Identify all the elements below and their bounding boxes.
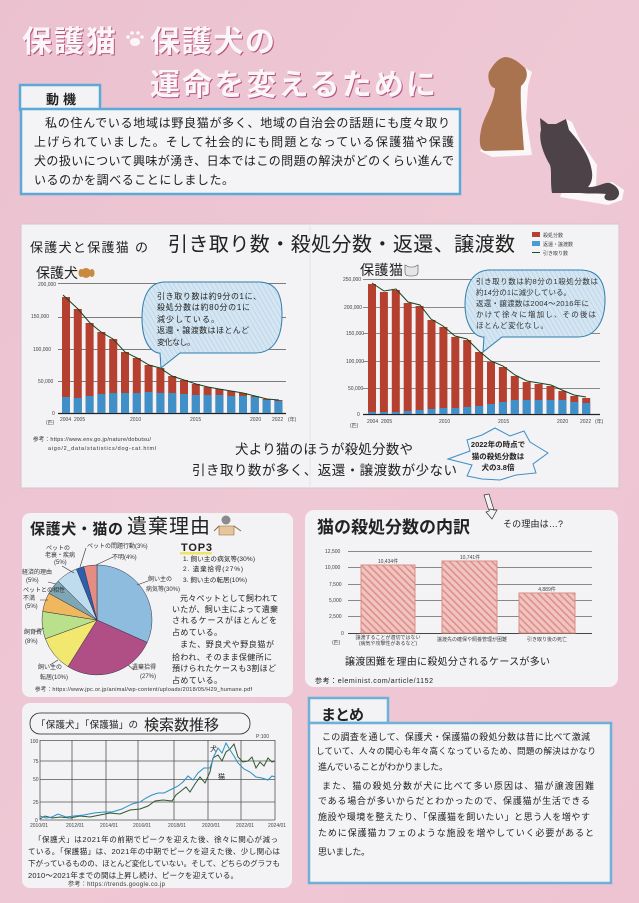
- pie leader lines: [35, 548, 148, 670]
- bar chart: 10,741件: [460, 554, 480, 561]
- conclusion tab: [309, 698, 388, 723]
- dog gridlines and axis labels: 0: [52, 411, 55, 417]
- conclusion text: また、猫の殺処分数が犬に比べて多い原因は、猫が譲渡困難: [322, 780, 594, 791]
- dog callout: 殺処分数は約80分の1に: [157, 302, 250, 312]
- pie labels: 老衰・疾病: [45, 551, 75, 559]
- motivation text: いるのかを調べることにしました。: [34, 173, 234, 187]
- bar chart: 0: [341, 631, 344, 637]
- summary text: [192, 442, 457, 478]
- cat gridlines and axis labels: 150,000: [346, 331, 364, 337]
- bar chart: [325, 549, 592, 647]
- pie labels: (5%): [26, 578, 39, 584]
- top 3: 3. 飼い主の転居(10%): [183, 575, 247, 584]
- bar chart: 2,500: [329, 614, 342, 620]
- cat chart label: 保護猫: [360, 262, 403, 278]
- search trends text: 下がっているものの、ほとんど変化していない。そして、どちらのグラフも: [28, 858, 280, 868]
- cat gridlines and axis labels: 250,000: [343, 277, 361, 283]
- icon: dog head: [78, 268, 94, 278]
- title: 保護猫: [23, 27, 117, 60]
- search trends text: 「保護犬」は2021年の前期でピークを迎えた後、徐々に関心が減っ: [34, 834, 278, 844]
- callout: 3.8 times burst: [448, 428, 548, 480]
- panel heading: 引き取り数・殺処分数・返還、譲渡数: [168, 233, 515, 256]
- dog gridlines and axis labels: 50,000: [38, 379, 54, 385]
- pie labels: 飼い主の: [38, 663, 62, 671]
- redraw arrow tip over panel: [486, 509, 497, 519]
- heading: 保護犬・猫の: [30, 520, 123, 538]
- legend: 返還・譲渡数: [543, 241, 573, 248]
- cat callout: 引き取り数は約8分の1殺処分数は: [476, 276, 598, 286]
- conclusion box: [309, 723, 611, 883]
- cat gridlines and axis labels: 2005: [381, 419, 392, 425]
- title: 運命を変えるために: [151, 70, 437, 103]
- cat gridlines and axis labels: 2020: [557, 419, 568, 425]
- search trends text: [28, 834, 280, 880]
- title: 保護猫: [22, 26, 116, 59]
- dog gridlines and axis labels: 2022: [272, 417, 283, 423]
- cat callout: 約14分の1に減少している。: [476, 287, 571, 297]
- dog gridlines and axis labels: 2010: [130, 417, 141, 423]
- pie labels: 飼い主の: [148, 575, 172, 583]
- cat callout: [465, 270, 605, 352]
- reasons text: [172, 594, 278, 685]
- dog callout: 引き取り数は約9分の1に、: [157, 291, 261, 301]
- motivation text: [34, 115, 454, 187]
- pie labels: 不満: [23, 594, 35, 602]
- pie labels: 転居(10%): [40, 673, 68, 681]
- reference: breakdown: 参考：eleminist.com/article/1152: [315, 676, 433, 685]
- callout: 3.8 times burst: 2022年の時点で: [471, 439, 526, 449]
- conclusion text: 思いました。: [318, 847, 370, 857]
- heading: [30, 515, 210, 538]
- dog gridlines and axis labels: 2004: [60, 417, 71, 423]
- reasons text: 占めている。: [172, 675, 222, 685]
- title: 保護犬の: [151, 27, 276, 60]
- line chart: 50: [33, 777, 39, 783]
- callout: 3.8 times burst: 猫の殺処分数は: [472, 451, 525, 461]
- panel heading: 保護犬と保護猫 の: [30, 240, 148, 255]
- motivation heading: 動機: [46, 92, 76, 107]
- line chart: 2014/01: [100, 823, 118, 829]
- panel: motivation: [20, 85, 460, 194]
- icon: dog in box: [214, 516, 241, 535]
- motivation text: 私の住んでいる地域は野良猫が多く、地域の自治会の話題にも度々取り: [45, 115, 450, 130]
- line chart: 25: [33, 800, 39, 806]
- line chart: 猫: [218, 772, 225, 781]
- cat gridlines and axis labels: [343, 277, 604, 429]
- bar chart: (病気や攻撃性があるなど): [359, 640, 417, 647]
- line chart: 0: [35, 818, 38, 824]
- dog callout: 変化なし。: [157, 337, 195, 347]
- motivation text: 上げられていました。そして社会的にも問題となっている保護猫や保護: [34, 134, 454, 149]
- title: 運命を変えるために: [150, 69, 436, 102]
- cat bars: euthanised: [368, 284, 590, 414]
- motivation text: 犬の扱いについて興味が湧き、日本ではこの問題の解決がどのくらい進んで: [34, 153, 454, 168]
- panel background: [21, 224, 619, 488]
- pie labels: 飼育費: [24, 628, 42, 636]
- reference: trends: 参考：https://trends.google.co.jp: [68, 880, 166, 888]
- search trends text: 2010〜2021年までの間は上昇し続け、ピークを迎えている。: [28, 870, 238, 880]
- pie labels: 不明(4%): [112, 554, 137, 561]
- pie labels: 遺棄拾得: [132, 663, 156, 671]
- cat callout: ほとんど変化なし。: [476, 320, 548, 330]
- reasons text: 預けられたケースも3割ほど: [172, 663, 276, 673]
- reasons text: 元々ペットとして飼われて: [180, 594, 278, 603]
- heading pill: 検索数推移: [144, 717, 219, 734]
- pie labels: [22, 542, 180, 681]
- pie labels: (5%): [25, 604, 38, 610]
- cat callout: 返還・譲渡数は2004〜2016年に: [476, 298, 589, 308]
- chart: dogs: [31, 265, 297, 426]
- panel background: [22, 703, 292, 888]
- dog gridlines and axis labels: 150,000: [31, 314, 49, 320]
- cat gridlines and axis labels: (匹): [350, 423, 359, 429]
- reasons text: されるケースがほとんどを: [172, 615, 277, 625]
- conclusion text: していて、人々の関心も年々高くなっているため、問題の解決はかなり: [316, 746, 596, 756]
- chart caption: 譲渡困難を理由に殺処分されるケースが多い: [345, 655, 550, 668]
- cat gridlines and axis labels: 2004: [367, 419, 378, 425]
- line chart: 2018/01: [168, 823, 186, 829]
- heading pill: 「保護犬」「保護猫」の: [36, 719, 138, 731]
- cat gridlines and axis labels: 200,000: [344, 305, 362, 311]
- line chart: 2010/01: [30, 823, 48, 829]
- question note: その理由は…?: [503, 518, 563, 529]
- dog chart label: 保護犬: [36, 265, 78, 281]
- cat line: intake: [372, 283, 586, 397]
- conclusion text: [316, 731, 596, 857]
- icon: paw: [126, 31, 144, 46]
- panel: conclusion: [309, 698, 611, 883]
- top 3: 1. 飼い主の病気等(30%): [183, 554, 255, 563]
- cat gridlines and axis labels: (年): [595, 418, 604, 425]
- reasons text: また、野良犬や野良猫が: [180, 639, 274, 649]
- pie chart: [42, 565, 152, 675]
- callout: 3.8 times burst: 犬の3.8倍: [482, 462, 515, 472]
- icon: cat head: [405, 265, 418, 276]
- dog callout: 減少している。: [157, 314, 219, 324]
- cat gridlines and axis labels: 100,000: [346, 359, 364, 365]
- summary text: 犬より猫のほうが殺処分数や: [235, 442, 413, 457]
- cat gridlines and axis labels: 50,000: [348, 386, 364, 392]
- pie labels: (8%): [25, 639, 38, 645]
- line chart: 100: [30, 739, 39, 745]
- reference: dogs and cats: 参考：https://www.env.go.jp/nature/dobutsu/: [33, 435, 151, 443]
- dog bars: euthanised: [62, 297, 282, 413]
- dog gridlines and axis labels: (年): [288, 416, 297, 423]
- line chart: 2016/01: [133, 823, 151, 829]
- legend: 引き取り数: [543, 250, 568, 257]
- bar chart: 12,500: [325, 549, 341, 555]
- bar chart: 引き取り後の死亡: [527, 636, 567, 643]
- dog gridlines and axis labels: (匹): [46, 420, 55, 426]
- line chart: 2024/01: [268, 823, 286, 829]
- pie labels: (27%): [140, 674, 156, 680]
- bar chart: 5,000: [329, 598, 342, 604]
- dog callout: [142, 282, 282, 368]
- pie labels: ペットの: [46, 545, 70, 552]
- title: [22, 26, 437, 103]
- cat gridlines and axis labels: 0: [357, 412, 360, 418]
- bar chart: 譲渡先の確保や飼養管理が困難: [437, 636, 507, 643]
- bar chart: 10,434件: [378, 558, 398, 565]
- series: cat searches: [40, 743, 275, 818]
- conclusion text: である場合が多いからだとわかったので、保護猫が生活できる: [318, 795, 590, 806]
- heading: 猫の殺処分数の内訳: [317, 518, 470, 537]
- reference: dogs and cats: [33, 435, 156, 452]
- reasons text: いたが、飼い主によって遺棄: [172, 604, 278, 614]
- dog gridlines and axis labels: 100,000: [33, 347, 51, 353]
- search trends text: ている。「保護猫」は、2021年の中期でピークを迎えた後、少し関心は: [28, 846, 280, 856]
- arrow: down to cat breakdown: [484, 494, 497, 519]
- chart: cats: [343, 262, 605, 429]
- pie labels: ペットの問題行動(3%): [87, 542, 148, 550]
- pie labels: 経済的理由: [22, 568, 52, 576]
- bar chart: 譲渡することが適切ではない: [355, 634, 421, 641]
- top 3: 2. 遺棄拾得(27%): [183, 564, 243, 573]
- top 3: TOP3: [181, 542, 212, 554]
- conclusion text: ために保護猫カフェのような施設を増やしていく必要があると: [318, 827, 594, 838]
- icon: cat: [540, 118, 624, 205]
- cat gridlines and axis labels: 2015: [498, 419, 509, 425]
- line chart: 2022/01: [236, 823, 254, 829]
- panel heading: [30, 233, 515, 256]
- reference: dogs and cats: aigo/2_data/statistics/dog-cat.html: [48, 446, 156, 452]
- dog gridlines and axis labels: 2020: [250, 417, 261, 423]
- bar chart: 7,500: [329, 582, 342, 588]
- dog bars: returned and adopted: [62, 392, 282, 413]
- dog gridlines and axis labels: [31, 282, 297, 426]
- motivation tab: [20, 85, 100, 110]
- conclusion text: この調査を通して、保護犬・保護猫の殺処分数は昔に比べて激減: [322, 731, 590, 742]
- heading: 遺棄理由: [127, 515, 210, 538]
- bar chart: 10,000: [325, 565, 341, 571]
- dog gridlines and axis labels: 2005: [74, 417, 85, 423]
- line chart: P:100: [256, 734, 269, 740]
- panel: cat euthanasia breakdown: [305, 509, 618, 687]
- dog callout: 返還・譲渡数はほとんど: [157, 325, 249, 335]
- line chart: 75: [33, 759, 39, 765]
- legend: [532, 232, 573, 257]
- bar chart: (匹): [332, 640, 341, 646]
- cat gridlines and axis labels: 2022: [580, 419, 591, 425]
- panel: search trends: [22, 703, 292, 888]
- motivation box: [21, 109, 460, 194]
- cat gridlines and axis labels: 2010: [439, 419, 450, 425]
- cat callout: かけて徐々に増加し、その後は: [476, 309, 596, 319]
- conclusion text: 施設や環境を整えたり、「保護猫を飼いたい」と思う人を増やす: [318, 811, 590, 822]
- icon: dog: [480, 57, 532, 157]
- conclusion heading: まとめ: [321, 707, 364, 724]
- heading pill: [30, 713, 250, 734]
- panel background: [305, 510, 618, 687]
- series: dog searches: [40, 744, 275, 819]
- dog gridlines and axis labels: 2015: [190, 417, 201, 423]
- bar chart: 4,889件: [538, 586, 556, 593]
- panel background: [22, 513, 293, 697]
- cat bars: returned and adopted: [368, 400, 590, 414]
- panel: abandonment reasons: [22, 513, 293, 697]
- summary text: 引き取り数が多く、返還・譲渡数が少ない: [192, 463, 457, 478]
- legend: 殺処分数: [543, 232, 563, 239]
- conclusion text: 進んでいることがわかりました。: [318, 761, 448, 772]
- reference: reasons: 参考：https://www.jpc.or.jp/animal/wp-content/uploads/2018/05/H29_humane.pdf: [35, 685, 252, 693]
- title: 保護犬の: [150, 26, 275, 59]
- line chart: 2020/01: [202, 823, 220, 829]
- panel: adoption chart panel: [21, 224, 619, 488]
- pie labels: ペットとの相性: [23, 586, 65, 594]
- reasons text: 占めている。: [172, 627, 222, 637]
- top 3: [180, 542, 255, 584]
- pie labels: 病気等(30%): [146, 585, 180, 593]
- dog line: intake: [63, 295, 279, 400]
- line chart: 2012/01: [66, 823, 84, 829]
- line chart: 犬: [210, 744, 217, 753]
- pie labels: (5%): [54, 560, 67, 566]
- reasons text: 拾われ、そのまま保健所に: [172, 652, 272, 662]
- line chart: [30, 734, 286, 829]
- dog gridlines and axis labels: 200,000: [38, 282, 56, 288]
